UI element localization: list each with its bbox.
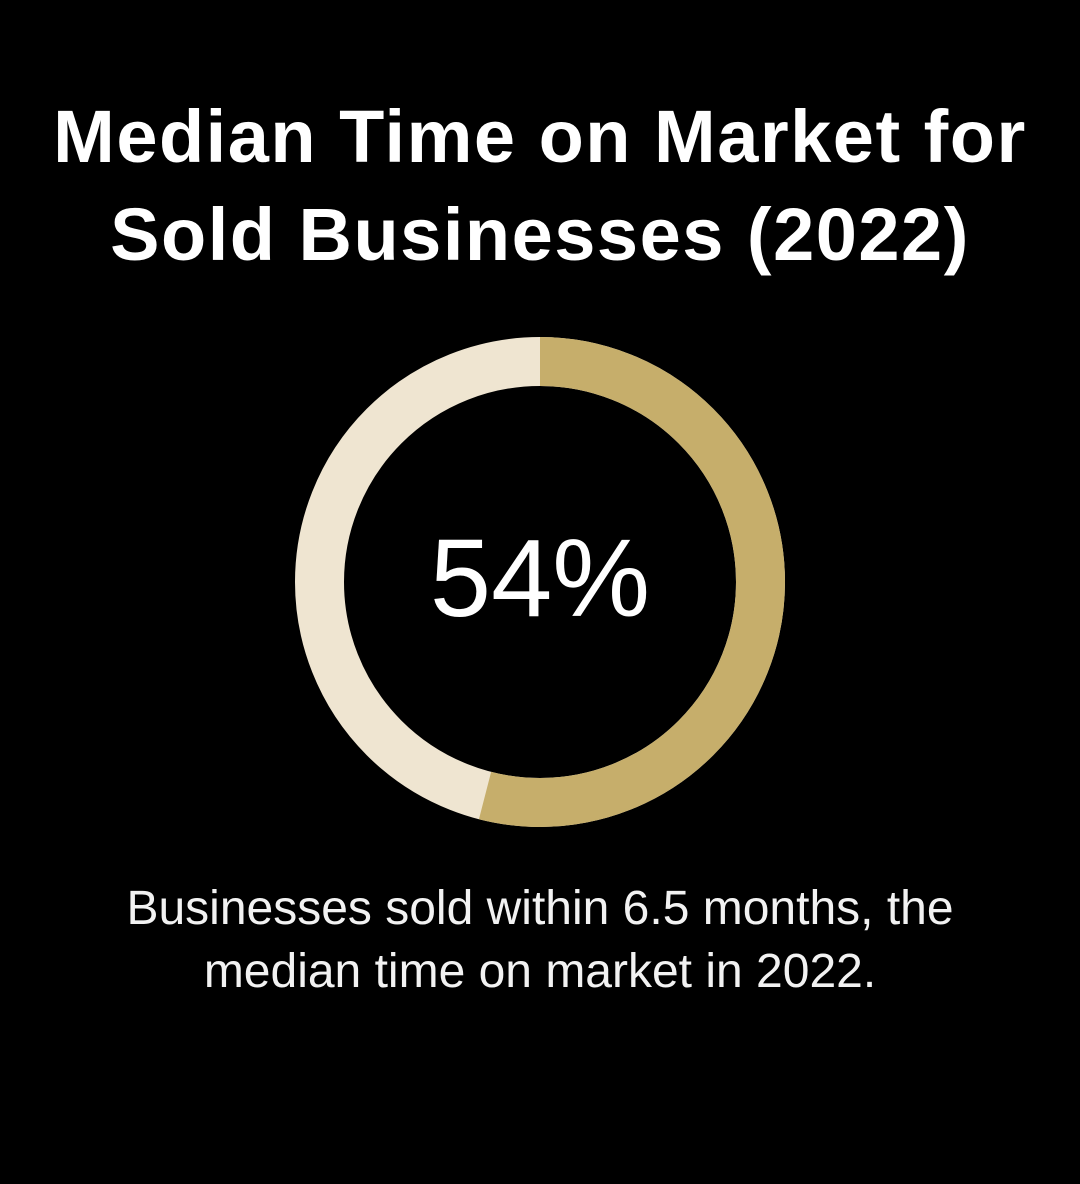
center value: 54%: [430, 517, 650, 640]
donut remainder segment: [320, 362, 760, 802]
title: [53, 95, 1027, 276]
donut 54% segment: [320, 362, 760, 802]
caption: median time on market in 2022.: [204, 945, 876, 998]
caption: [126, 882, 954, 998]
caption: Businesses sold within 6.5 months, the: [126, 882, 954, 935]
donut chart: [295, 337, 785, 827]
title: Sold Businesses (2022): [110, 193, 970, 276]
title: Median Time on Market for: [53, 95, 1027, 178]
